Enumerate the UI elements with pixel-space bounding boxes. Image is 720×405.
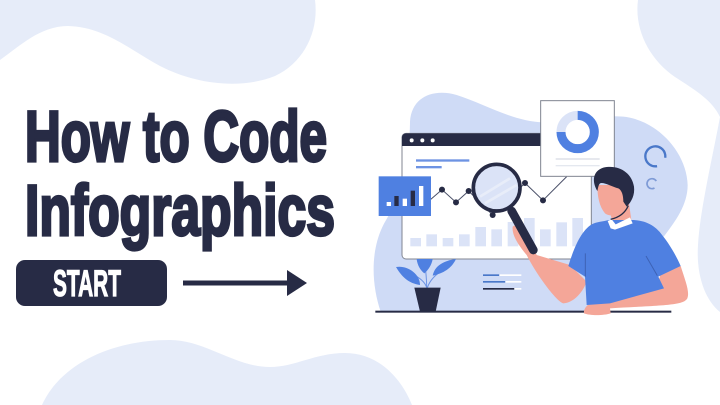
illustration backdrop blob [374,93,688,312]
neck [608,198,632,228]
hair [594,167,634,207]
plant [396,259,456,312]
start button: START [53,263,121,304]
window text lines [416,159,469,162]
background blob: bottom [42,340,412,405]
title line 2: Infographics [25,172,335,251]
title [25,98,335,251]
donut chart card [541,101,614,176]
face [597,185,626,215]
far arm and hand [584,262,688,315]
torso [568,220,681,305]
arrow [183,270,307,296]
arm [513,225,587,303]
loading rings [644,145,667,190]
collar [608,217,633,230]
line chart [430,177,567,218]
background blob: top left [0,0,316,84]
illustration [374,93,688,315]
start button [16,260,167,306]
magnifying glass [473,164,533,250]
person [513,167,688,315]
title line 1: How to Code [25,98,327,177]
small text lines [483,274,521,290]
desk line [375,311,671,313]
bar chart card [379,176,431,216]
browser window [402,133,591,259]
background bars [410,218,583,246]
background blob: right [637,0,720,312]
